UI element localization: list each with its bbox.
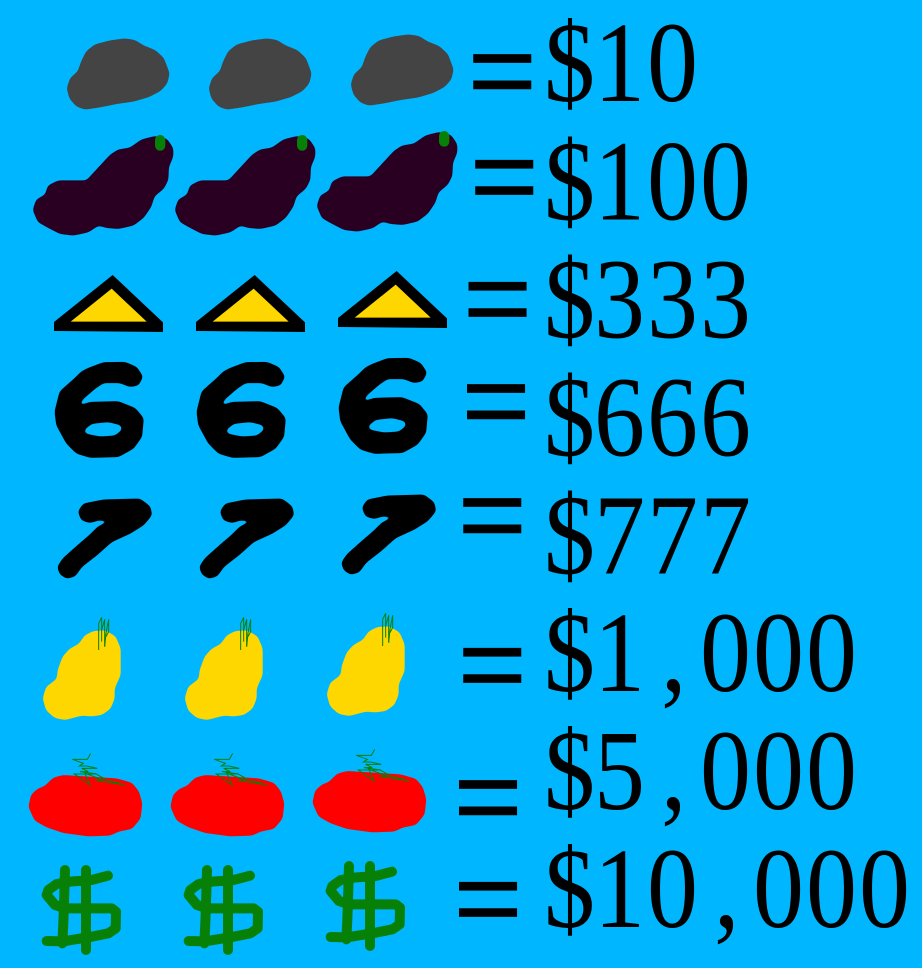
equals sign: = bbox=[454, 827, 522, 968]
icon: dollar 2 bbox=[189, 870, 258, 950]
row: tomato $5,000 bbox=[29, 709, 857, 871]
row: potato $10 bbox=[67, 0, 698, 145]
icon: eggplant 2 bbox=[175, 135, 315, 235]
equals sign: = bbox=[468, 0, 536, 145]
icon: six 2 bbox=[197, 362, 285, 457]
icon: cheese 3 bbox=[338, 271, 447, 328]
value: $5,000 bbox=[544, 709, 857, 834]
value: $1,000 bbox=[544, 591, 857, 716]
icon: lemon 2 bbox=[185, 617, 262, 719]
value: $100 bbox=[544, 119, 751, 245]
icon: six 3 bbox=[339, 358, 427, 453]
equals sign: = bbox=[454, 726, 522, 871]
value: $333 bbox=[544, 237, 751, 363]
icon: lemon 1 bbox=[43, 617, 120, 719]
row: cheese $333 bbox=[54, 227, 751, 372]
row: dollar $10,000 bbox=[47, 827, 910, 968]
equals sign: = bbox=[470, 105, 538, 250]
row: lemon $1,000 bbox=[43, 591, 857, 738]
equals sign: = bbox=[458, 593, 526, 738]
icon: tomato 2 bbox=[171, 753, 284, 836]
equals sign: = bbox=[462, 330, 530, 475]
icon: seven 3 bbox=[342, 495, 436, 574]
icon: tomato 3 bbox=[313, 749, 426, 832]
row: seven $777 bbox=[58, 444, 751, 599]
icon: cheese 1 bbox=[54, 275, 163, 332]
equals sign: = bbox=[458, 444, 526, 589]
icon: potato 3 bbox=[351, 35, 453, 105]
value: $777 bbox=[544, 473, 751, 599]
equals sign: = bbox=[464, 227, 531, 372]
value: $666 bbox=[544, 355, 751, 481]
value: $10,000 bbox=[544, 827, 910, 952]
icon: seven 2 bbox=[200, 499, 294, 578]
icon: lemon 3 bbox=[327, 613, 404, 715]
icon: potato 1 bbox=[67, 39, 169, 109]
icon: tomato 1 bbox=[29, 753, 142, 836]
icon: seven 1 bbox=[58, 499, 152, 578]
row: eggplant $100 bbox=[33, 105, 751, 250]
value: $10 bbox=[544, 1, 698, 126]
icon: eggplant 3 bbox=[317, 131, 457, 231]
icon: six 1 bbox=[55, 362, 143, 457]
icon: dollar 1 bbox=[47, 870, 116, 950]
row: six $666 bbox=[55, 330, 751, 481]
icon: eggplant 1 bbox=[33, 135, 173, 235]
icon: cheese 2 bbox=[196, 275, 305, 332]
icon: dollar 3 bbox=[331, 866, 400, 946]
icon: potato 2 bbox=[209, 39, 311, 109]
